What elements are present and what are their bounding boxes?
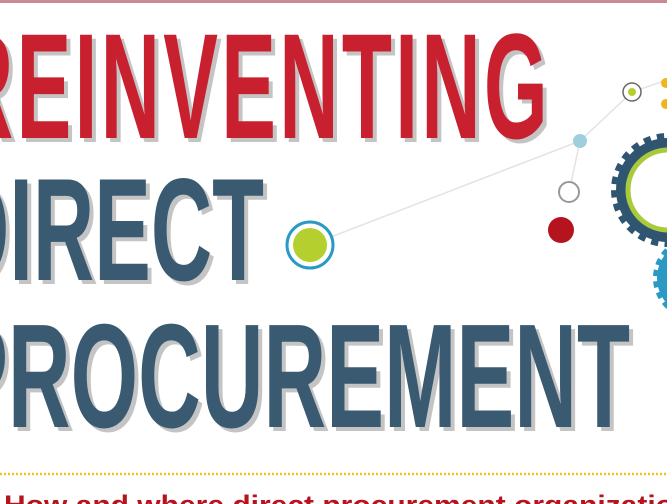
icon: blue gear	[657, 240, 667, 316]
connector lines	[310, 80, 667, 245]
top border	[0, 0, 667, 3]
dotted divider	[0, 473, 667, 475]
icon: big lime node	[287, 222, 333, 268]
icon: small nodes	[548, 78, 667, 243]
icon: dark gear	[616, 138, 667, 242]
title: direct	[0, 148, 268, 315]
